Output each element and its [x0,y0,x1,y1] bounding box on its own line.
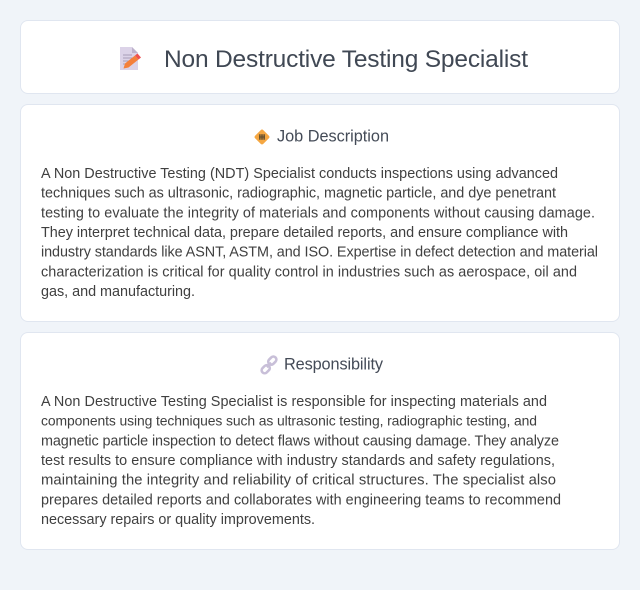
text block: responsibility: components using techniques such as ultrasonic testing, radiographic testing, and [41,413,537,429]
heading: responsibility: Responsibility [284,356,384,374]
text block: job description: gas, and manufacturing. [41,284,195,300]
text block: responsibility: test results to ensure compliance with industry standards and safety regulations, [41,453,555,469]
panel: responsibility [20,332,620,550]
text block: responsibility: magnetic particle inspection to detect flaws without causing damage. They analyze [41,433,559,449]
icon: memo with pencil [120,47,141,70]
heading: job description: Job Description [277,128,389,146]
text block: responsibility [41,394,561,528]
text block: job description: A Non Destructive Testing (NDT) Specialist conducts inspections using advanced [41,166,558,182]
title: Non Destructive Testing Specialist [164,46,528,73]
text block: job description: characterization is critical for quality control in industries such as aerospace, oil and [41,264,577,280]
text block: job description: techniques such as ultrasonic, radiographic, magnetic particle, and dye penetrant [41,186,556,202]
text block: job description [41,166,598,300]
text block: responsibility: maintaining the integrity and reliability of critical structures. The specialist also [41,473,556,489]
icon: diamond warning sign [254,130,270,144]
text block: responsibility: necessary repairs or quality improvements. [41,512,315,528]
text block: job description: They interpret technical data, prepare detailed reports, and ensure compliance with [41,225,568,241]
icon: chain link [260,355,278,374]
panel: job description [20,104,620,322]
text block: responsibility: prepares detailed reports and collaborates with engineering teams to recommend [41,492,561,508]
text block: job description: testing to evaluate the integrity of materials and components without causing damage. [41,205,595,221]
panel: title card [20,20,620,94]
text block: job description: industry standards like ASNT, ASTM, and ISO. Expertise in defect detection and material [41,245,598,261]
text block: responsibility: A Non Destructive Testing Specialist is responsible for inspecting materials and [41,394,547,410]
